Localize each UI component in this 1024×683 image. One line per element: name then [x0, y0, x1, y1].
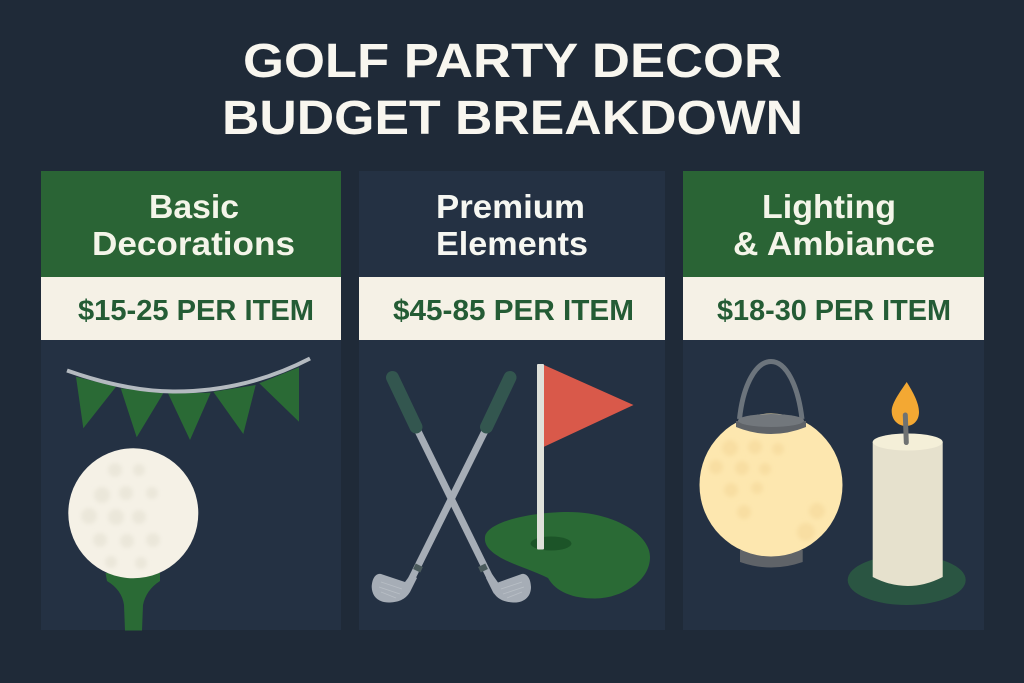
- header: lighting and ambiance: [683, 171, 984, 277]
- title: BUDGET BREAKDOWN: [222, 92, 803, 145]
- price: premium elements: $45-85 PER ITEM: [393, 295, 634, 327]
- panel: basic decorations: [41, 171, 341, 630]
- icon: golf tee: [106, 573, 160, 630]
- icon: bunting: [67, 358, 310, 440]
- header: basic decorations: Basic: [149, 188, 239, 225]
- header: basic decorations: Decorations: [92, 225, 295, 262]
- icon: candle: [848, 382, 966, 605]
- icon: lantern: [700, 362, 842, 568]
- icon: crossed golf clubs: [372, 378, 531, 603]
- icon: flag: [537, 364, 634, 550]
- price: premium elements: [359, 277, 665, 340]
- icon: golf ball: [68, 448, 198, 578]
- price: basic decorations: $15-25 PER ITEM: [78, 295, 314, 327]
- title: [222, 35, 803, 145]
- panel: premium elements: [359, 171, 665, 630]
- header: premium elements: [436, 188, 588, 262]
- price: basic decorations: [41, 277, 341, 340]
- header: premium elements: Elements: [436, 225, 588, 262]
- price: lighting and ambiance: [683, 277, 984, 340]
- header: lighting and ambiance: & Ambiance: [733, 225, 935, 262]
- panel: lighting and ambiance: [683, 171, 984, 630]
- header: lighting and ambiance: Lighting: [762, 188, 896, 225]
- price: lighting and ambiance: $18-30 PER ITEM: [717, 295, 951, 327]
- title: GOLF PARTY DECOR: [243, 35, 782, 88]
- header: premium elements: Premium: [436, 188, 585, 225]
- header: basic decorations: [41, 171, 341, 277]
- icon: putting green: [485, 512, 650, 598]
